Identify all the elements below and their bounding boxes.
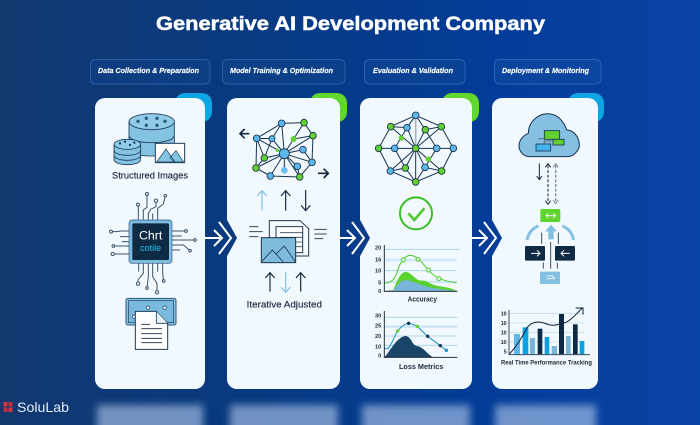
arrow: step 1 to step 2: [205, 218, 237, 258]
charts: card 3: [375, 245, 460, 371]
icons: card 3: [375, 112, 457, 229]
arrows: cloud data flow: [537, 163, 558, 204]
chart: real time performance: 10: [501, 340, 507, 346]
logo: SoluLab: SoluLab: [17, 399, 69, 415]
title: Generative AI Development Company: [156, 13, 545, 35]
chart: loss metrics: 10: [375, 344, 381, 350]
icon: circuit traces: [109, 192, 196, 294]
chart: loss metrics: 0: [378, 354, 381, 360]
step header: data collection: [90, 60, 210, 84]
arrows: upper iteration: [257, 190, 310, 211]
icon: green sync button: [540, 209, 560, 222]
icon: cloud: [519, 114, 579, 157]
panel: data collection: [95, 98, 205, 389]
icons: card 4: [519, 114, 579, 284]
card 4 accent tab: [568, 93, 604, 122]
chart: real time performance: 10: [501, 330, 507, 336]
panel: model training: [227, 98, 340, 389]
chart: loss metrics: 20: [375, 334, 381, 340]
icon: document on screen: [126, 298, 176, 349]
chart: loss metrics: [375, 311, 457, 371]
panel: evaluation: [360, 98, 472, 389]
icon: validation network: [375, 112, 457, 185]
arrows: network flow: [240, 129, 328, 178]
icons: card 1: [109, 114, 196, 349]
icon: image: [155, 143, 185, 163]
step header: model training: [222, 60, 345, 84]
step header: evaluation: [364, 60, 465, 84]
icon: check mark: [400, 197, 432, 229]
chart: real time performance: [501, 308, 592, 367]
icon: processor chip: Chrt: [139, 228, 163, 242]
arrow: step 2 to step 3: [340, 218, 370, 258]
arrows: lower iteration: [265, 272, 305, 292]
label: iterative adjusted: Iterative Adjusted: [247, 299, 322, 309]
chart: real time performance: 10: [501, 321, 507, 327]
step header: deployment: [494, 60, 601, 84]
chart: accuracy: Accuracy: [408, 295, 438, 304]
chart: real time performance: 10: [501, 311, 507, 317]
icons: card 2: [240, 119, 328, 309]
card reflections: [97, 405, 596, 425]
step header: evaluation: Evaluation & Validation: [373, 68, 453, 75]
label: structured images: Structured Images: [112, 170, 189, 180]
chart: loss metrics: 30: [375, 313, 381, 319]
card 2 accent tab: [310, 93, 347, 122]
chart: accuracy: 5: [378, 281, 381, 287]
icon: large database: [129, 114, 174, 156]
chart: accuracy: 20: [375, 245, 381, 251]
chart: real time performance: Real Time Performance Tracking: [501, 360, 592, 367]
icon: dark direction buttons: [525, 246, 575, 261]
icon: light blue button: [540, 272, 560, 284]
step header: model training: Model Training & Optimization: [230, 68, 333, 75]
chart: loss metrics: Loss Metrics: [399, 362, 443, 371]
step header: deployment: Deployment & Monitoring: [502, 68, 590, 75]
chart: accuracy: 0: [378, 289, 381, 295]
arrow: step 3 to step 4: [472, 218, 502, 258]
chart: loss metrics: 25: [375, 324, 381, 330]
chart: accuracy: [375, 245, 460, 304]
panel: deployment: [492, 98, 598, 389]
icon: neural network: [253, 119, 316, 180]
chart: real time performance: 5: [504, 350, 507, 356]
step header: data collection: Data Collection & Preparation: [98, 68, 199, 75]
chart: accuracy: 16: [375, 257, 381, 263]
card 3 accent tab: [442, 93, 479, 122]
icon: documents and image: [249, 221, 327, 263]
icon: processor chip: cotile: [140, 243, 161, 253]
icon: feedback loop: [527, 225, 574, 269]
chart: accuracy: 10: [375, 269, 381, 275]
icon: processor chip: [129, 220, 172, 263]
card 1 accent tab: [175, 93, 212, 122]
icon: small database: [114, 139, 141, 165]
